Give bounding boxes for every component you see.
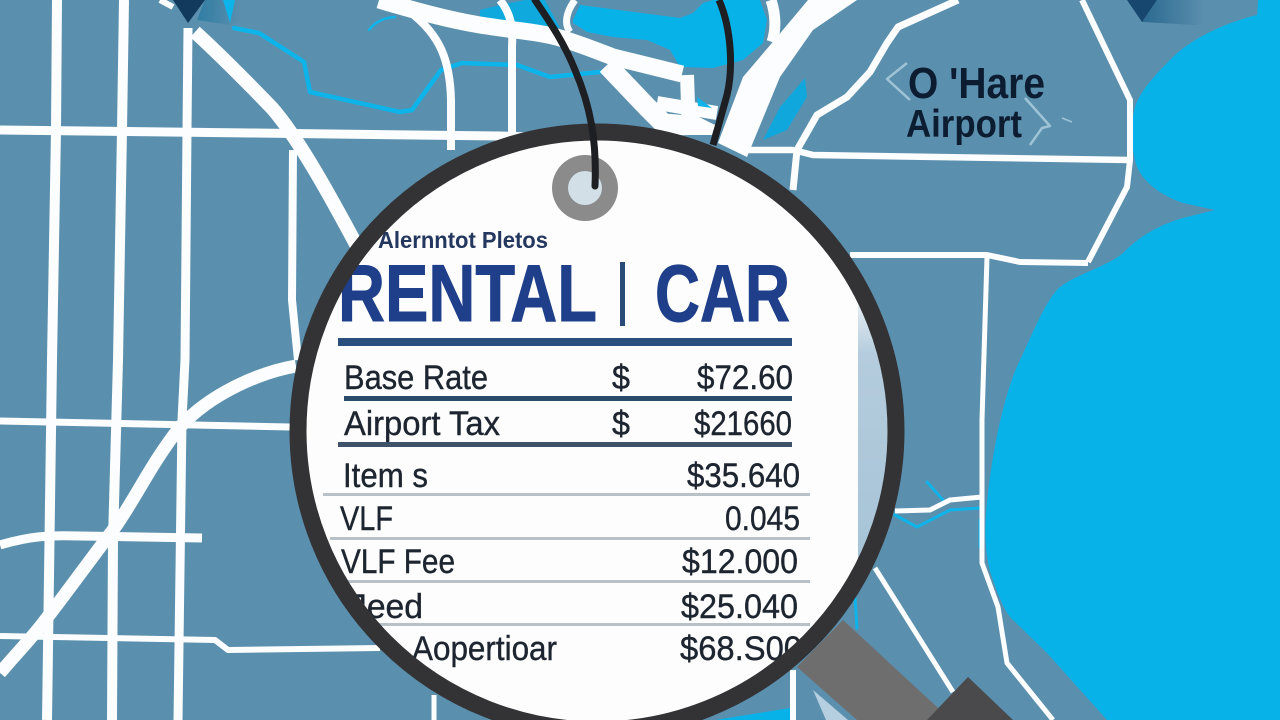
row: weed bbox=[356, 592, 797, 620]
tag heading: RENTAL bbox=[338, 249, 597, 339]
row: items bbox=[346, 461, 799, 490]
highways bbox=[195, 32, 358, 248]
row: airport tax: $ bbox=[612, 405, 630, 443]
small water inset at interchange bbox=[697, 97, 712, 108]
receipt content bbox=[323, 227, 810, 668]
airport runway outline bbox=[887, 63, 1072, 145]
heading rule bbox=[338, 338, 792, 346]
tag string: right strand bbox=[713, 0, 731, 145]
river: left water section bbox=[480, 0, 560, 28]
paper side shadow bbox=[858, 304, 888, 558]
row: VLF fee: VLF Fee bbox=[341, 543, 455, 581]
lake bbox=[985, 0, 1280, 720]
tag heading: CAR bbox=[655, 249, 790, 339]
tag paper bbox=[297, 131, 897, 720]
row: VLF: VLF bbox=[340, 500, 393, 538]
water patches at the bottom bbox=[715, 708, 790, 720]
row: items: Item s bbox=[343, 457, 428, 495]
tag string: left strand bbox=[535, 0, 595, 186]
row: aopertioar bbox=[413, 634, 800, 668]
row: base rate bbox=[346, 363, 792, 392]
map label: O'Hare Airport: O 'Hare bbox=[908, 59, 1045, 108]
row: airport tax bbox=[344, 409, 791, 442]
row: base rate: $72.60 bbox=[697, 359, 793, 397]
tag subtitle: Alernntot Pletos bbox=[378, 227, 548, 253]
tag grommet bbox=[552, 155, 618, 221]
rental car tag in magnifier lens bbox=[297, 131, 898, 720]
map pin: top left bbox=[173, 0, 252, 25]
water patch near highway bbox=[763, 78, 807, 140]
row: VLF fee bbox=[340, 547, 797, 576]
row: aopertioar: Aopertioar bbox=[412, 630, 557, 668]
row: airport tax: Airport Tax bbox=[344, 405, 500, 443]
row: aopertioar: $68.S00 bbox=[680, 630, 802, 668]
row: VLF bbox=[340, 506, 799, 530]
row: base rate: Base Rate bbox=[344, 359, 488, 397]
row: VLF: 0.045 bbox=[725, 500, 800, 538]
river: top water body bbox=[573, 0, 767, 68]
magnifier handle bbox=[797, 620, 1013, 720]
row: items: $35.640 bbox=[687, 457, 800, 495]
map pin: top right bbox=[1127, 0, 1258, 25]
map label: O'Hare Airport bbox=[906, 59, 1045, 146]
row: weed: $25.040 bbox=[681, 588, 798, 626]
row: VLF fee: $12.000 bbox=[682, 543, 798, 581]
row: airport tax: $21660 bbox=[694, 405, 792, 443]
row: base rate: $ bbox=[612, 359, 630, 397]
map label: O'Hare Airport: Airport bbox=[906, 103, 1022, 146]
magnifier ring bbox=[298, 132, 896, 720]
river: thin blue channels bbox=[234, 17, 980, 628]
row: weed: Jeed bbox=[350, 588, 423, 626]
tag heading bbox=[342, 262, 790, 326]
